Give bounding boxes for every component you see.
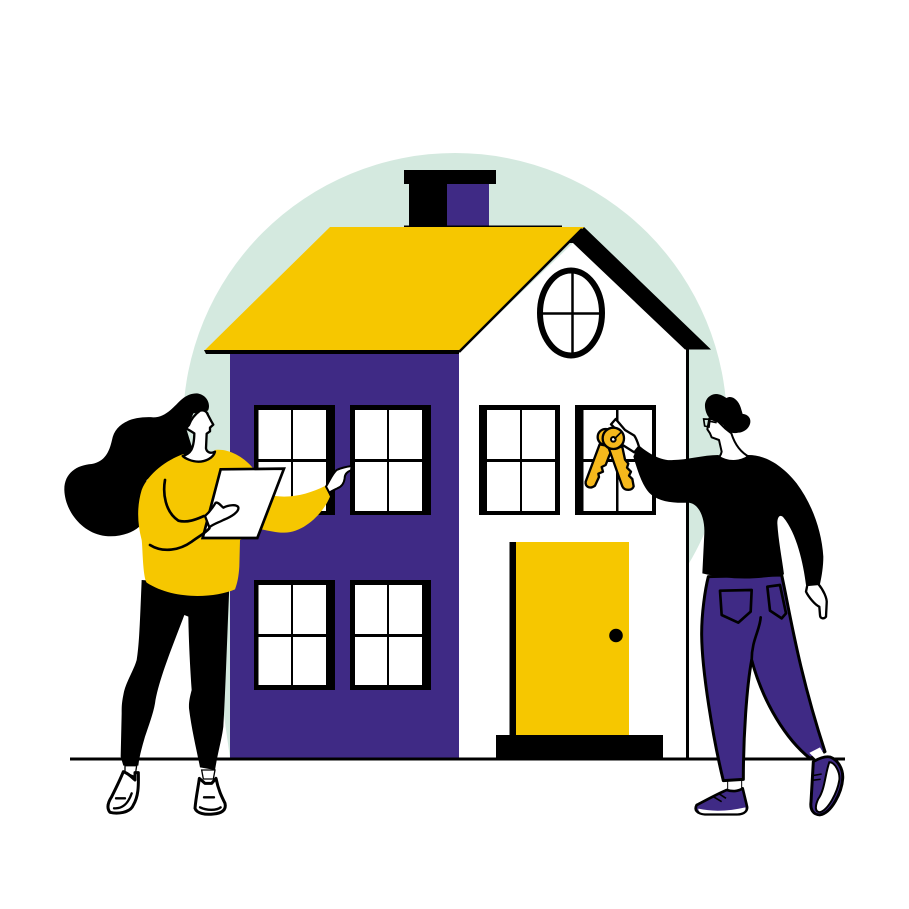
front key xyxy=(603,428,634,490)
back sock xyxy=(809,747,824,760)
back foot xyxy=(809,747,843,815)
upper left window 2 xyxy=(350,405,431,515)
right wall edge line xyxy=(686,349,689,759)
pockets and crease xyxy=(720,585,786,660)
woman upper body xyxy=(64,393,352,596)
oval attic window xyxy=(540,270,603,356)
man holding keys xyxy=(586,394,843,815)
left shoe xyxy=(108,772,138,813)
right sock xyxy=(202,770,215,779)
man upper body xyxy=(633,394,827,618)
white wall xyxy=(459,243,687,758)
hair xyxy=(705,394,750,433)
trousers xyxy=(702,575,825,781)
hand on clipboard xyxy=(205,503,238,527)
raised hand xyxy=(611,419,639,452)
left sock xyxy=(125,766,137,777)
sweater xyxy=(138,450,330,596)
front shoe xyxy=(696,788,747,814)
hair xyxy=(64,393,209,536)
purple wall xyxy=(230,352,460,758)
right shoe xyxy=(195,778,225,814)
pointing hand xyxy=(326,466,352,493)
door step xyxy=(496,735,663,759)
upper left window 1 xyxy=(254,405,335,515)
sweater xyxy=(633,445,823,585)
face and neck xyxy=(183,410,215,462)
front sock xyxy=(728,780,742,792)
woman legs xyxy=(108,580,229,814)
man trousers and shoes xyxy=(696,575,825,814)
roof xyxy=(204,227,711,354)
lower left window 2 xyxy=(350,580,431,690)
lower left window 1 xyxy=(254,580,335,690)
sweater sleeve lines xyxy=(150,480,209,550)
upper right window 2 xyxy=(575,405,656,515)
lower hand xyxy=(806,584,827,618)
back key xyxy=(586,429,614,487)
woman with clipboard xyxy=(64,393,352,814)
front door xyxy=(510,542,629,735)
raised hand with keys xyxy=(586,419,639,490)
clipboard xyxy=(203,469,284,538)
back shoe xyxy=(811,757,843,815)
chimney xyxy=(404,170,562,228)
ground line xyxy=(70,758,845,760)
neck and face xyxy=(707,418,750,461)
background mint circle xyxy=(183,153,727,758)
house xyxy=(204,170,711,759)
glasses xyxy=(704,419,717,427)
upper right window 1 xyxy=(479,405,560,515)
